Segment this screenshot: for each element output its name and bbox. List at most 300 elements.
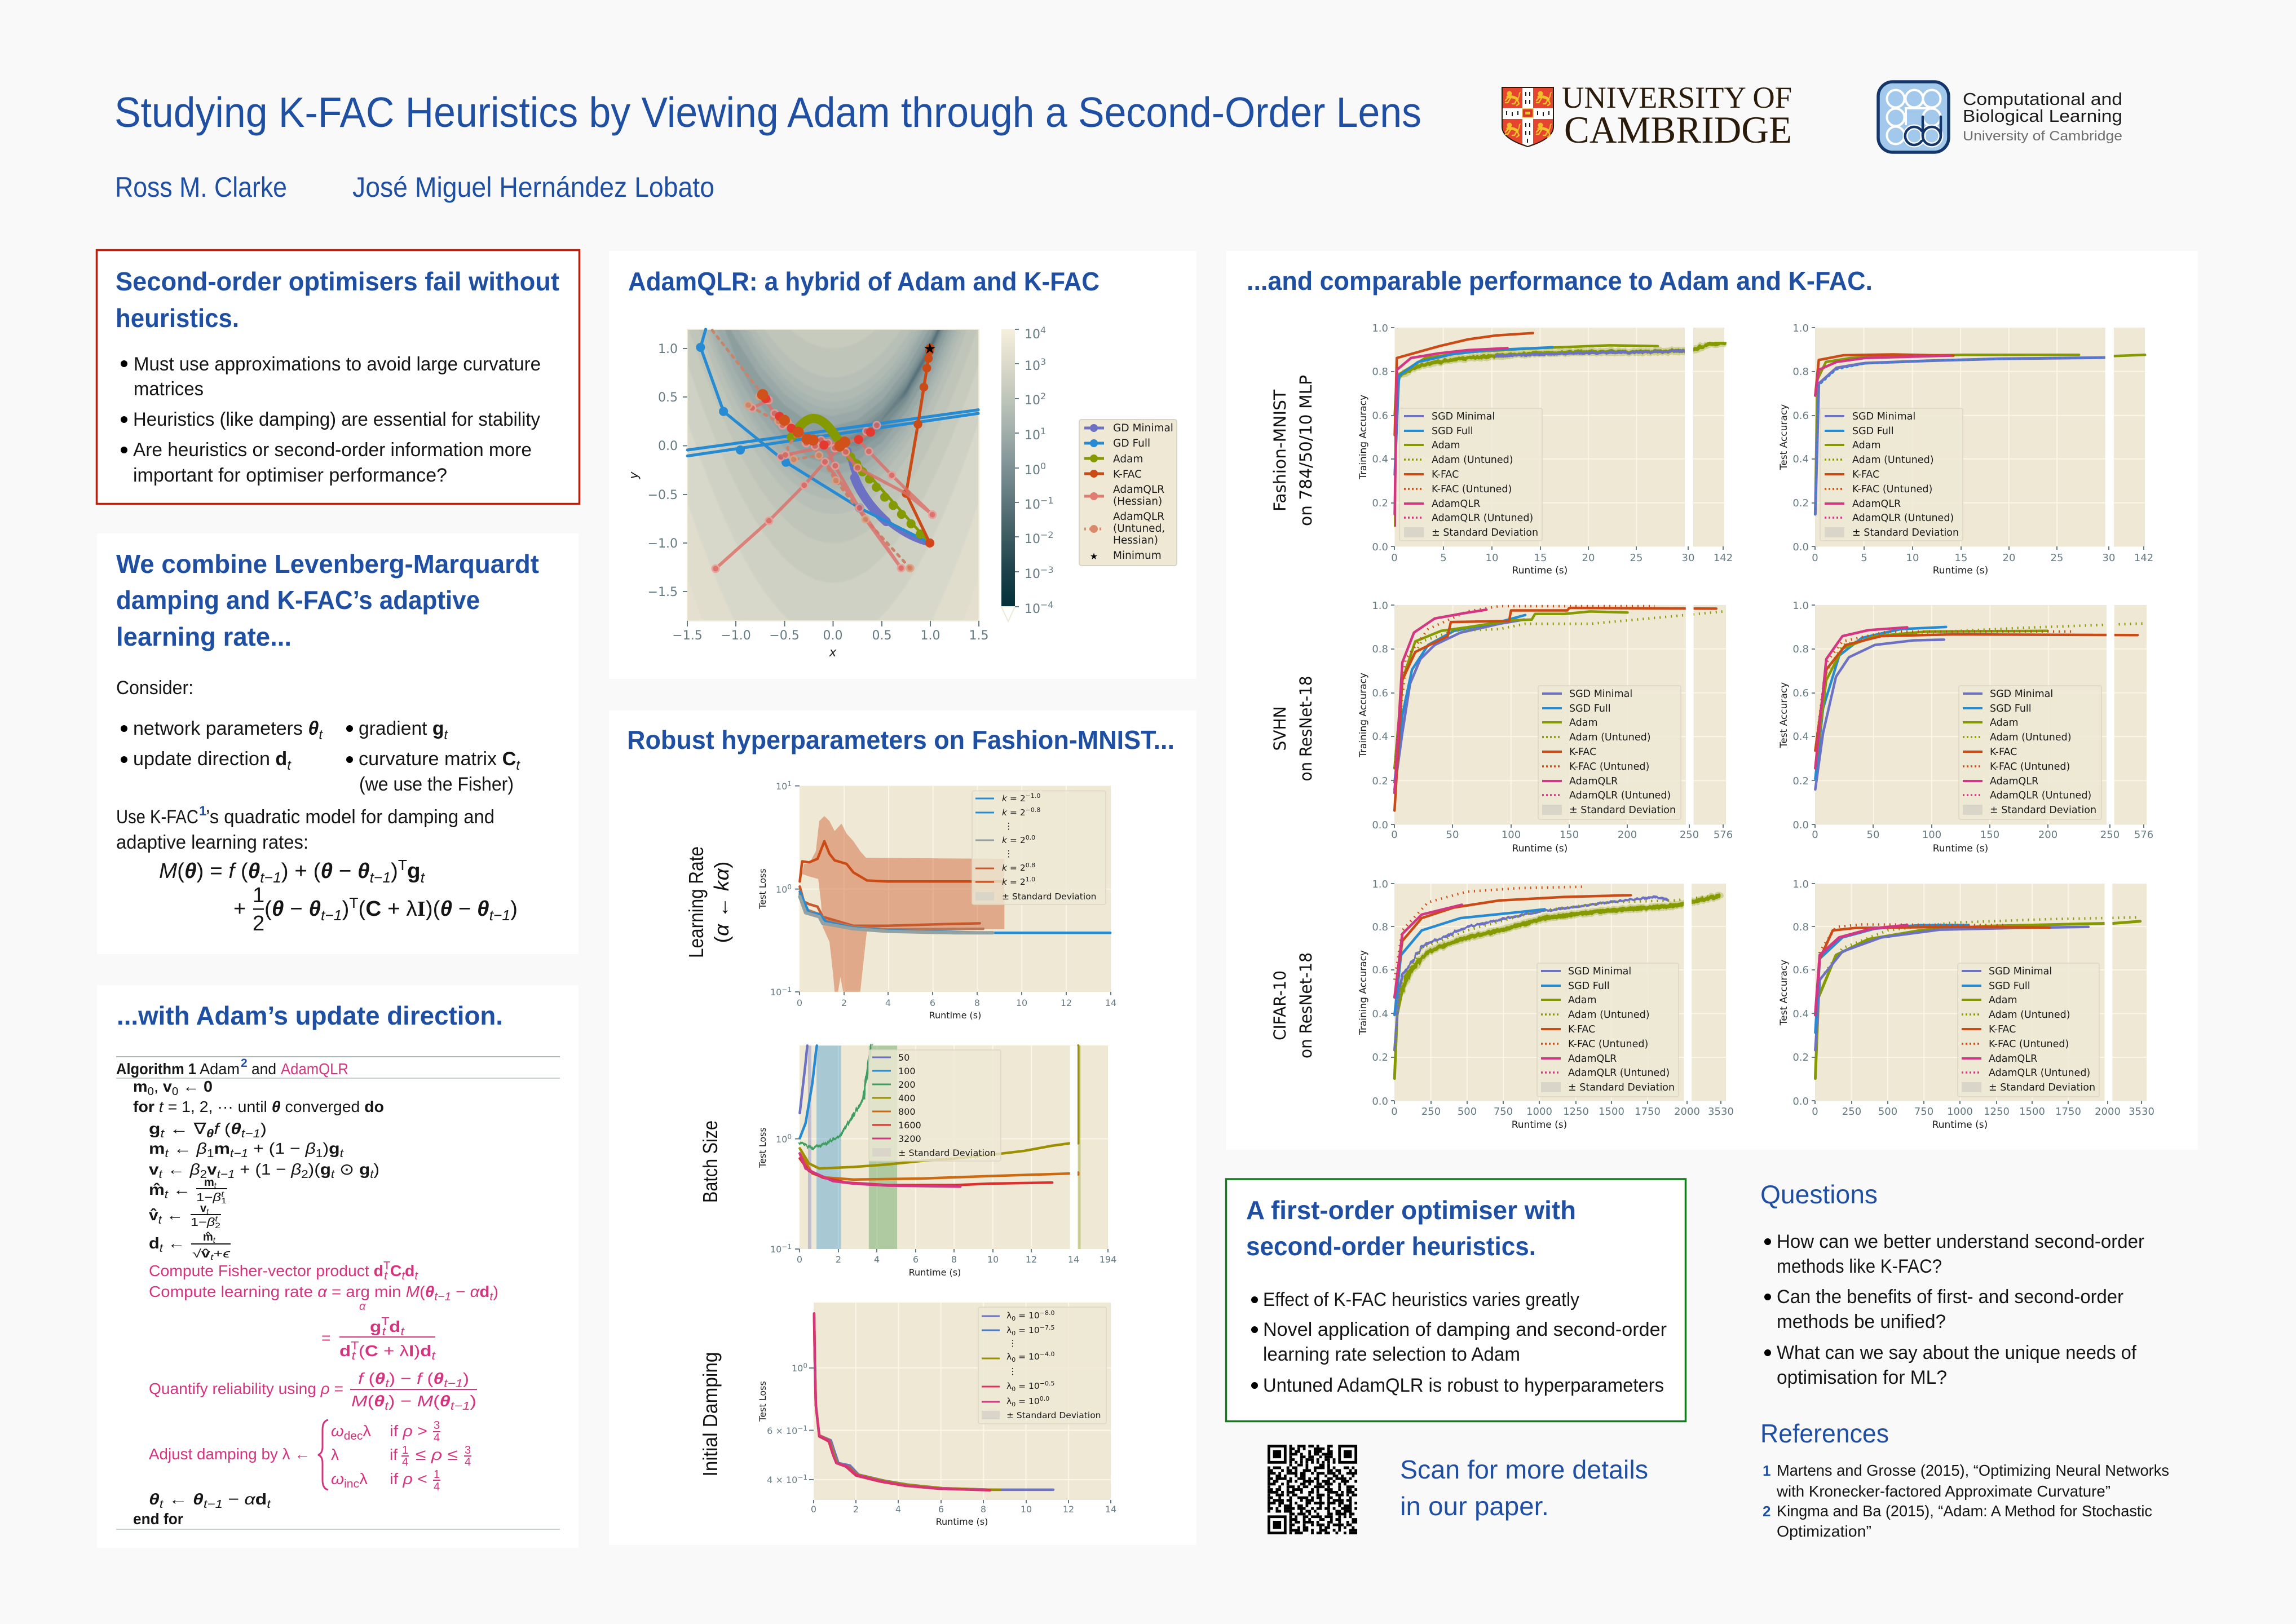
algorithm: M(θ: [351, 1392, 383, 1410]
chart: learning rate sensitivity: 0: [797, 998, 802, 1008]
chart: Fashion-MNIST training accuracy: 0.0: [1372, 541, 1388, 553]
legend: SGD Minimal: [1569, 689, 1632, 700]
chart: initial damping sensitivity: −1: [797, 1424, 807, 1432]
text: quadratic model: ’s quadratic model for damping and: [206, 806, 494, 828]
legend: Adam (Untuned): [1852, 454, 1934, 466]
algorithm: t: [431, 1350, 436, 1362]
equation: quadratic model M: [159, 857, 518, 935]
chart: optimiser trajectories on Rosenbrock contour: [631, 328, 988, 656]
bullet list: [1251, 1289, 1667, 1396]
legend: trajectories: Minimum: [1113, 550, 1162, 562]
algorithm: ←: [169, 1140, 196, 1157]
algorithm: 4: [465, 1456, 471, 1468]
chart: CIFAR-10 training accuracy: 2000: [1674, 1106, 1700, 1118]
colorbar: [1001, 325, 1054, 621]
chart: SVHN test accuracy: 0.4: [1792, 731, 1809, 743]
chart: CIFAR-10 test accuracy: 0.0: [1792, 1096, 1809, 1107]
algorithm: 1: [434, 1468, 440, 1481]
algorithm: v: [163, 1078, 172, 1095]
chart: CIFAR-10 training accuracy: 0.8: [1372, 921, 1388, 933]
algorithm: Compute learning rate α = arg min M(θ: [149, 1283, 434, 1300]
algorithm: t: [210, 1252, 214, 1261]
legend: ± Standard Deviation: [1568, 1082, 1675, 1093]
colorbar: 10: [1025, 567, 1040, 581]
algorithm: f: [214, 1120, 221, 1137]
logo: Computational and Biological Learning: [1878, 82, 2122, 152]
chart: SVHN training accuracy: 0: [1391, 829, 1398, 841]
chart: CIFAR-10 training accuracy: 1.0: [1372, 879, 1388, 890]
chart: initial damping sensitivity: 0: [811, 1504, 816, 1515]
legend: trajectories: ★: [1090, 551, 1098, 562]
section: questions: What can we say about the unique needs of: [1777, 1342, 2137, 1363]
chart: optimiser trajectories on Rosenbrock contour: 1.5: [969, 629, 989, 643]
algorithm: d: [405, 1262, 414, 1279]
algorithm: and: [251, 1060, 276, 1078]
algorithm: ←: [178, 1078, 204, 1095]
chart: optimiser trajectories on Rosenbrock contour: 0.0: [658, 439, 678, 453]
legend: batch sizes: 200: [898, 1079, 916, 1090]
section: questions: Questions: [1760, 1180, 1878, 1209]
algorithm: ⊙: [334, 1160, 359, 1178]
chart: SVHN training accuracy: 0.0: [1372, 819, 1388, 831]
chart: Fashion-MNIST training accuracy: 20: [1582, 552, 1595, 564]
chart: batch size sensitivity: 14: [1068, 1254, 1079, 1265]
colorbar: 10: [1025, 532, 1040, 546]
algorithm: 0: [172, 1085, 178, 1098]
chart: SVHN test accuracy: 0.0: [1792, 819, 1809, 831]
chart: CIFAR-10 test accuracy: 0.4: [1792, 1008, 1809, 1020]
heading: damping and K-FAC’s adaptive: [116, 585, 480, 615]
row label: Fashion-MNIST: [1270, 375, 1315, 526]
algorithm: √v̂: [192, 1248, 207, 1260]
text: scan for more details: in our paper.: [1400, 1491, 1549, 1521]
algorithm: β: [196, 1140, 207, 1157]
section: references: Kingma and Ba (2015), “Adam: A Method for Stochastic: [1777, 1502, 2152, 1520]
chart: CIFAR-10 training accuracy: 1000: [1526, 1106, 1552, 1118]
equation: quadratic model M: ) + (: [281, 859, 321, 883]
chart: SVHN test accuracy: 576: [2134, 829, 2153, 841]
algorithm: 0: [148, 1085, 154, 1098]
chart: batch size sensitivity: 8: [951, 1254, 957, 1265]
contour band F=5: [725, 330, 948, 465]
algorithm: 2: [200, 1168, 207, 1181]
chart: Fashion-MNIST test accuracy: 20: [2003, 552, 2015, 564]
equation: quadratic model M: ): [510, 897, 518, 921]
chart: Fashion-MNIST test accuracy: Runtime (s): [1933, 565, 1988, 576]
chart: Fashion-MNIST test accuracy: 0: [1812, 552, 1818, 564]
legend: AdamQLR: [1990, 776, 2038, 787]
chart: SVHN training accuracy: Runtime (s): [1512, 843, 1568, 854]
legend: AdamQLR: [1989, 1053, 2037, 1065]
algorithm: β: [304, 1140, 316, 1157]
legend: SGD Full: [1569, 703, 1611, 714]
colorbar: 10: [1025, 394, 1040, 408]
algorithm: t: [370, 1168, 374, 1181]
algorithm: g: [329, 1140, 340, 1157]
algorithm: ←: [164, 1490, 193, 1508]
chart: SVHN test accuracy: 1.0: [1792, 600, 1809, 612]
chart: initial damping sensitivity: 4 × 10: [767, 1475, 797, 1485]
colorbar: 0: [1040, 461, 1046, 471]
section: references: References: [1760, 1419, 1889, 1448]
legend: k values: k = 2: [1002, 835, 1026, 845]
chart: Fashion-MNIST training accuracy: 0.8: [1372, 366, 1388, 378]
algorithm: ←: [162, 1160, 190, 1178]
legend: AdamQLR: [1568, 1053, 1617, 1065]
algorithm: m: [214, 1140, 230, 1157]
chart: initial damping sensitivity: 6: [938, 1504, 944, 1515]
chart: SVHN test accuracy: [1778, 600, 2153, 854]
chart: SVHN test accuracy: Runtime (s): [1933, 843, 1988, 854]
algorithm: 2: [215, 1221, 220, 1230]
legend: initial damping: 0.0: [1040, 1395, 1049, 1402]
legend: batch sizes: ± Standard Deviation: [898, 1148, 996, 1158]
chart: CIFAR-10 test accuracy: 0: [1812, 1106, 1818, 1118]
chart: Fashion-MNIST test accuracy: 0.0: [1792, 541, 1809, 553]
equation: quadratic model M: ): [342, 897, 349, 921]
section: references: Martens and Grosse (2015), “Optimizing Neural Networks: [1777, 1462, 2169, 1479]
algorithm: g: [370, 1318, 381, 1335]
bullet list: Heuristics (like damping) are essential for stability: [133, 409, 540, 430]
bullet list: definitions: t: [287, 758, 292, 773]
equation: quadratic model M: M(θ) = f (θ: [159, 859, 260, 883]
algorithm: αd: [244, 1490, 265, 1508]
QR code: [1268, 1445, 1357, 1534]
legend: ± Standard Deviation: [1989, 1082, 2095, 1093]
section: references: 2: [1763, 1503, 1770, 1520]
chart: CIFAR-10 training accuracy: Runtime (s): [1512, 1119, 1567, 1131]
chart: CIFAR-10 training accuracy: 500: [1458, 1106, 1477, 1118]
legend: k values: −0.8: [1026, 806, 1040, 814]
bullet list: definitions: t: [444, 727, 448, 743]
chart: SVHN training accuracy: 200: [1618, 829, 1637, 841]
chart: learning rate sensitivity: 8: [974, 998, 980, 1008]
legend: batch sizes: 100: [898, 1066, 916, 1076]
legend: initial damping: = 10: [1015, 1352, 1040, 1362]
legend: initial damping: [978, 1307, 1106, 1424]
chart: Fashion-MNIST training accuracy: 25: [1630, 552, 1642, 564]
equation: quadratic model M: t−1: [489, 907, 510, 924]
algorithm: C: [390, 1262, 401, 1279]
text: quadratic model: [116, 804, 494, 853]
chart: CIFAR-10 test accuracy: 1.0: [1792, 879, 1809, 890]
chart: initial damping sensitivity: 2: [853, 1504, 859, 1515]
algorithm: m: [133, 1078, 148, 1095]
algorithm: Adam: [200, 1060, 240, 1078]
chart: SVHN training accuracy: 1.0: [1372, 600, 1388, 612]
algorithm: β: [290, 1160, 301, 1178]
section: questions: Can the benefits of first- and second-order: [1777, 1286, 2123, 1308]
legend: K-FAC: [1568, 1024, 1595, 1035]
row label: learning rate: [685, 846, 733, 958]
chart: batch size sensitivity: 10: [776, 1134, 787, 1145]
chart: CIFAR-10 test accuracy: 750: [1914, 1106, 1933, 1118]
equation: quadratic model M: (: [359, 897, 366, 921]
algorithm: Adjust damping by λ ←: [149, 1445, 310, 1463]
bullet list: definitions: (we use the Fisher): [359, 774, 514, 795]
algorithm: ): [463, 1370, 469, 1387]
chart: SVHN training accuracy: 150: [1560, 829, 1579, 841]
legend: k values: [972, 791, 1106, 904]
legend: initial damping: λ: [1006, 1396, 1012, 1406]
chart: Fashion-MNIST test accuracy: 0.8: [1792, 366, 1809, 378]
colorbar: 3: [1040, 356, 1046, 367]
logo: Computational and Biological Learning: University of Cambridge: [1963, 129, 2122, 144]
algorithm: t: [352, 1350, 356, 1362]
legend: initial damping: = 10: [1015, 1325, 1040, 1335]
colorbar: −3: [1040, 564, 1054, 575]
algorithm: ω: [331, 1422, 344, 1440]
chart: learning rate sensitivity: Test Loss: [757, 868, 768, 910]
bullet list: [121, 354, 541, 486]
equation: quadratic model M: T: [349, 894, 359, 911]
algorithm: β: [189, 1160, 200, 1178]
chart: CIFAR-10 training accuracy: 1500: [1599, 1106, 1624, 1118]
chart: Fashion-MNIST test accuracy: 5: [1861, 552, 1867, 564]
chart: optimiser trajectories on Rosenbrock contour: −1.5: [648, 585, 678, 599]
colorbar: 10: [1025, 328, 1040, 342]
chart: SVHN test accuracy: 250: [2100, 829, 2120, 841]
chart: learning rate sensitivity: 4: [885, 998, 891, 1008]
chart: batch size sensitivity: Test Loss: [757, 1127, 768, 1168]
chart: Fashion-MNIST test accuracy: 30: [2103, 552, 2115, 564]
chart: SVHN training accuracy: 576: [1714, 829, 1733, 841]
legend: trajectories: GD Full: [1113, 438, 1150, 449]
bullet list: Are heuristics or second-order information more: [133, 439, 532, 461]
legend: K-FAC (Untuned): [1569, 761, 1649, 773]
algorithm: [116, 1057, 498, 1528]
legend: Adam: [1569, 717, 1598, 729]
algorithm: 2: [241, 1057, 248, 1070]
legend: K-FAC (Untuned): [1989, 1039, 2069, 1050]
legend: initial damping: ⋮: [1008, 1338, 1017, 1348]
section: questions: [1760, 1180, 2144, 1388]
chart: CIFAR-10 test accuracy: [1778, 879, 2154, 1131]
chart: CIFAR-10 training accuracy: 0.2: [1372, 1052, 1388, 1063]
chart: optimiser trajectories on Rosenbrock contour: y: [627, 471, 641, 480]
legend: k values: k = 2: [1002, 877, 1026, 887]
chart: learning rate sensitivity: 10: [1016, 998, 1027, 1008]
algorithm: t−1: [434, 1291, 451, 1303]
legend: SGD Full: [1568, 981, 1610, 992]
chart: CIFAR-10 test accuracy: 1250: [1984, 1106, 2010, 1118]
algorithm: (θ: [223, 1120, 240, 1137]
equation: quadratic model M: T: [398, 857, 407, 873]
chart: CIFAR-10 training accuracy: 1750: [1635, 1106, 1661, 1118]
algorithm: t: [414, 1270, 418, 1282]
legend: [1399, 408, 1542, 541]
chart: Fashion-MNIST test accuracy: 0.4: [1792, 453, 1809, 465]
chart: CIFAR-10 test accuracy: 250: [1842, 1106, 1861, 1118]
legend: SGD Minimal: [1568, 966, 1631, 977]
legend: AdamQLR (Untuned): [1569, 790, 1671, 801]
chart: SVHN training accuracy: 100: [1502, 829, 1521, 841]
legend: SGD Full: [1432, 426, 1473, 437]
algorithm: v̂: [149, 1206, 158, 1224]
heading: A first-order optimiser with: [1246, 1195, 1576, 1225]
legend: initial damping: ⋮: [1008, 1366, 1017, 1376]
algorithm: t: [214, 1181, 217, 1190]
chart: SVHN test accuracy: 200: [2038, 829, 2057, 841]
chart: SVHN training accuracy: 0.2: [1372, 775, 1388, 787]
algorithm: t−1: [230, 1148, 248, 1160]
panel: robust hyperparameters: [609, 710, 1196, 1545]
legend: Adam (Untuned): [1569, 732, 1651, 743]
bullet list: definitions: curvature matrix C: [359, 748, 516, 770]
chart: CIFAR-10 training accuracy: Training Accuracy: [1358, 950, 1369, 1035]
chart: initial damping sensitivity: [757, 1303, 1116, 1527]
chart: CIFAR-10 test accuracy: 1000: [1947, 1106, 1973, 1118]
algorithm: f (θ: [417, 1370, 442, 1387]
chart: batch size sensitivity: 12: [1026, 1254, 1037, 1265]
chart: Fashion-MNIST test accuracy: 25: [2051, 552, 2063, 564]
algorithm: 1: [207, 1148, 214, 1160]
chart: initial damping sensitivity: Runtime (s): [936, 1516, 988, 1527]
legend: batch sizes: 400: [898, 1093, 916, 1104]
chart: learning rate sensitivity: 1: [787, 780, 792, 788]
legend: initial damping: 0: [1012, 1330, 1015, 1337]
legend: Adam: [1989, 995, 2017, 1006]
legend: batch sizes: 1600: [898, 1120, 921, 1131]
legend: SGD Minimal: [1432, 411, 1495, 422]
bullet list: definitions: t: [319, 727, 323, 743]
legend: SGD Full: [1989, 981, 2030, 992]
legend: initial damping: = 10: [1015, 1310, 1040, 1321]
algorithm: t: [215, 1214, 219, 1223]
legend: initial damping: 0: [1012, 1356, 1015, 1363]
algorithm: d: [339, 1342, 351, 1360]
legend: SGD Minimal: [1852, 411, 1915, 422]
legend: K-FAC (Untuned): [1568, 1039, 1648, 1050]
panel: Adam's update direction: [97, 985, 579, 1548]
chart: Fashion-MNIST training accuracy: 5: [1440, 552, 1447, 564]
algorithm: t: [159, 1168, 163, 1181]
chart: Fashion-MNIST test accuracy: 0.2: [1792, 497, 1809, 509]
row label: initial damping: Initial Damping: [699, 1352, 722, 1476]
legend: trajectories: Hessian): [1113, 535, 1158, 546]
legend: SGD Minimal: [1990, 689, 2053, 700]
algorithm: t: [382, 1326, 387, 1338]
contour band F=0.3: [882, 354, 926, 420]
colorbar: 10: [1025, 429, 1040, 443]
legend: AdamQLR (Untuned): [1568, 1067, 1670, 1079]
bullet list: Novel application of damping and second-order: [1263, 1319, 1667, 1340]
algorithm: t: [331, 1168, 335, 1181]
chart: optimiser trajectories on Rosenbrock contour: 1.0: [920, 629, 941, 643]
algorithm: θ: [149, 1490, 160, 1508]
equation: quadratic model M: C + λI)(θ − θ: [365, 897, 489, 921]
algorithm: ): [374, 1160, 379, 1178]
chart: CIFAR-10 test accuracy: Runtime (s): [1932, 1119, 1988, 1131]
algorithm: t: [400, 1326, 405, 1338]
legend: AdamQLR: [1569, 776, 1618, 787]
legend: K-FAC: [1432, 469, 1459, 480]
row label: Fashion-MNIST: Fashion-MNIST: [1270, 389, 1290, 511]
algorithm: t: [165, 1148, 169, 1160]
legend: k values: −1.0: [1026, 792, 1040, 800]
algorithm: t: [489, 1291, 494, 1303]
colorbar: 4: [1040, 325, 1046, 336]
algorithm: T: [351, 1340, 359, 1352]
legend: AdamQLR: [1432, 498, 1480, 510]
legend: trajectories: [1079, 420, 1177, 566]
algorithm: inc: [344, 1478, 359, 1490]
chart: Fashion-MNIST training accuracy: 0.6: [1372, 410, 1388, 422]
legend: [1959, 686, 2101, 819]
legend: trajectories: GD Minimal: [1113, 422, 1173, 434]
chart: Fashion-MNIST training accuracy: 0: [1391, 552, 1398, 564]
algorithm: αd: [470, 1283, 489, 1300]
chart: SVHN training accuracy: [1358, 600, 1733, 854]
chart: batch size sensitivity: 6: [913, 1254, 919, 1265]
text: consider: Consider:: [116, 677, 193, 699]
chart: Fashion-MNIST training accuracy: 1.0: [1372, 323, 1388, 334]
chart: initial damping sensitivity: 12: [1063, 1504, 1074, 1515]
chart: batch size sensitivity: 2: [836, 1254, 841, 1265]
chart: optimiser trajectories on Rosenbrock contour: −0.5: [769, 629, 800, 643]
equation: quadratic model M: t−1: [260, 869, 281, 886]
algorithm: t: [206, 1207, 209, 1216]
chart: learning rate sensitivity: 14: [1105, 998, 1116, 1008]
equation: quadratic model M: t−1: [370, 869, 391, 886]
equation: quadratic model M: t: [421, 869, 426, 886]
heading: second-order heuristics.: [1246, 1232, 1536, 1261]
algorithm: λ: [359, 1470, 368, 1488]
chart: initial damping sensitivity: 10: [1021, 1504, 1032, 1515]
algorithm: 4: [434, 1481, 440, 1493]
legend: k values: k = 2: [1002, 807, 1026, 818]
text: quadratic model: Use K-FAC: [116, 806, 198, 828]
chart: Fashion-MNIST test accuracy: 142: [2134, 552, 2153, 564]
algorithm: ω: [331, 1470, 344, 1488]
chart: Fashion-MNIST test accuracy: 0.6: [1792, 410, 1809, 422]
algorithm: t: [213, 1235, 216, 1245]
legend: SGD Full: [1990, 703, 2032, 714]
heading: learning rate...: [116, 622, 292, 651]
chart: optimiser trajectories on Rosenbrock contour: 0.5: [658, 391, 678, 405]
algorithm: t−1: [241, 1128, 260, 1140]
bullet list: definitions: network parameters θ: [133, 718, 319, 739]
algorithm: −: [223, 1490, 244, 1508]
algorithm: t−1: [451, 1400, 470, 1413]
algorithm: if ρ >: [390, 1422, 427, 1440]
chart: learning rate sensitivity: 6: [930, 998, 935, 1008]
bullet list: definitions: update direction d: [133, 748, 287, 770]
section: references: 1: [1763, 1462, 1770, 1479]
chart: learning rate sensitivity: 12: [1061, 998, 1072, 1008]
algorithm: θ: [193, 1490, 204, 1508]
chart: CIFAR-10 training accuracy: 0: [1391, 1106, 1398, 1118]
algorithm: 2: [301, 1168, 308, 1181]
equation: quadratic model M: g: [407, 859, 421, 883]
chart: batch size sensitivity: [757, 1045, 1116, 1278]
algorithm: ): [260, 1120, 267, 1137]
algorithm: d: [389, 1318, 400, 1335]
colorbar: 10: [1025, 464, 1040, 478]
chart: CIFAR-10 training accuracy: 0.4: [1372, 1008, 1388, 1020]
bullet list: definitions: gradient g: [359, 718, 444, 739]
algorithm: 3: [465, 1444, 471, 1457]
legend: initial damping: 0: [1012, 1315, 1015, 1322]
algorithm: θ: [206, 1128, 214, 1140]
section: questions: methods be unified?: [1777, 1311, 1946, 1332]
legend: K-FAC (Untuned): [1432, 484, 1512, 495]
chart: SVHN test accuracy: 0.6: [1792, 687, 1809, 699]
legend: k values: ⋮: [1004, 849, 1013, 859]
legend: ± Standard Deviation: [1432, 527, 1538, 539]
legend: initial damping: −4.0: [1040, 1351, 1054, 1358]
chart: CIFAR-10 test accuracy: 1500: [2019, 1106, 2045, 1118]
